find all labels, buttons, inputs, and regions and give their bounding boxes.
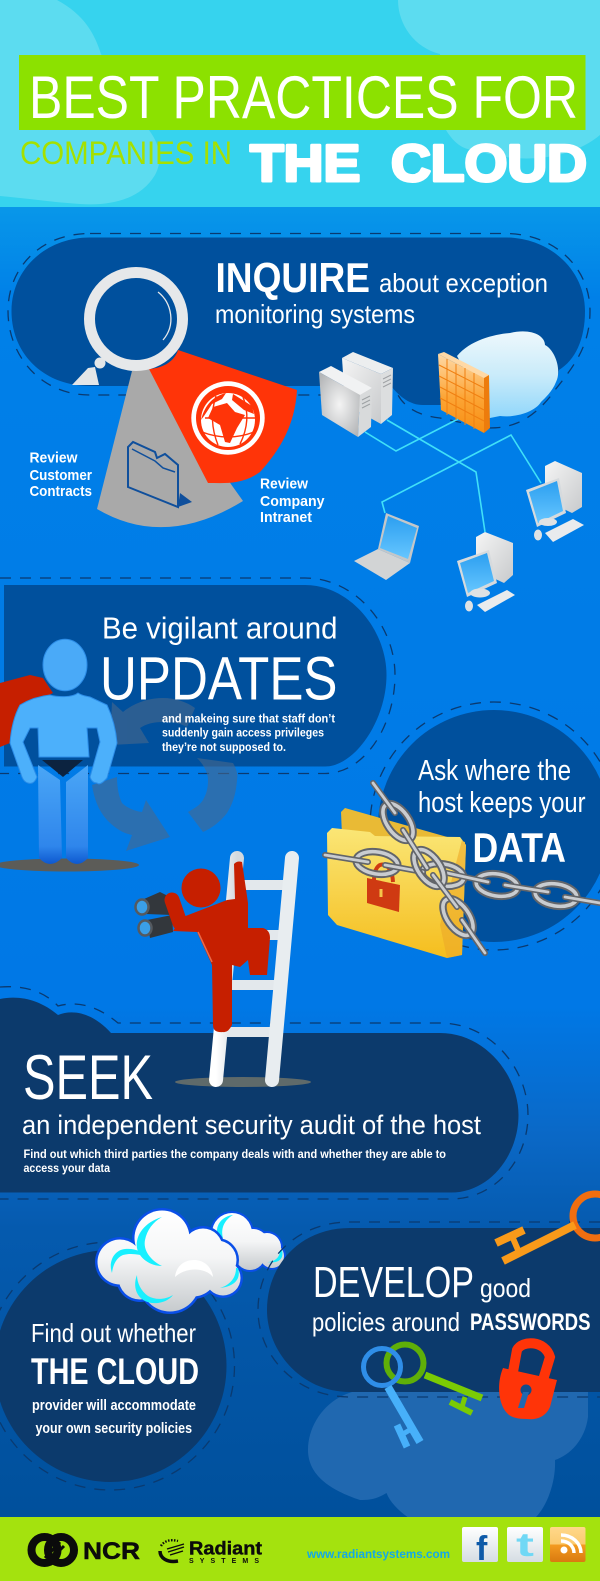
panel shape bbox=[12, 238, 585, 405]
icon: red padlock large bbox=[499, 1343, 557, 1419]
panel: updates bbox=[0, 578, 395, 872]
label: review company intranet: Intranet bbox=[260, 509, 312, 526]
cloud shape: lower right bbox=[308, 1392, 588, 1517]
panel: seek bbox=[0, 987, 528, 1199]
text: updates detail: they’re not supposed to. bbox=[162, 742, 286, 754]
heading: be vigilant around: Be vigilant around bbox=[102, 610, 338, 646]
panel shape bbox=[378, 710, 600, 942]
header background bbox=[0, 0, 600, 207]
panel: footer bbox=[0, 1517, 600, 1581]
panel: header bbox=[0, 0, 600, 207]
icon: big white cloud bbox=[95, 1208, 243, 1314]
icon: circular arrows bbox=[92, 698, 237, 851]
icon: desktop right bbox=[526, 461, 584, 542]
panel shape bbox=[4, 585, 386, 766]
icon: facebook: f bbox=[476, 1530, 488, 1568]
logo: NCR bbox=[32, 1537, 140, 1565]
heading: data: DATA bbox=[472, 824, 566, 871]
logo: NCR: NCR bbox=[83, 1538, 140, 1565]
text: security policies: provider will accommodate bbox=[32, 1397, 196, 1414]
text: website: www.radiantsystems.com bbox=[306, 1547, 450, 1561]
logo: Radiant Systems: SYSTEMS bbox=[189, 1558, 259, 1565]
text: seek detail: Find out which third parties the company deals with and whether they are able to bbox=[24, 1147, 446, 1161]
heading: seek: SEEK bbox=[23, 1043, 153, 1113]
label: review customer contracts: Review bbox=[30, 450, 78, 466]
text: seek detail: access your data bbox=[24, 1161, 110, 1175]
ladder bbox=[216, 858, 292, 1080]
panel: data bbox=[325, 702, 600, 958]
icon: twitter: t bbox=[516, 1526, 534, 1563]
text: security policies: your own security policies bbox=[36, 1420, 192, 1437]
label: review customer contracts bbox=[30, 450, 92, 500]
wedge: company intranet bbox=[149, 350, 297, 483]
dashed outline bbox=[8, 234, 590, 428]
icon: firewall bbox=[438, 352, 490, 433]
cloud shape: header right bbox=[398, 0, 600, 158]
logo: Radiant Systems bbox=[160, 1538, 262, 1565]
heading: inquire: INQUIRE bbox=[216, 254, 370, 301]
text: good: good bbox=[480, 1273, 531, 1303]
label: review customer contracts: Customer bbox=[30, 467, 92, 484]
icon: orange key bbox=[496, 1194, 600, 1261]
text: updates detail bbox=[162, 714, 335, 754]
illustration: hero bbox=[0, 639, 139, 872]
icon: servers bbox=[319, 352, 393, 437]
label: review company intranet: Company bbox=[260, 493, 325, 510]
icon: blue key bbox=[364, 1348, 420, 1447]
panel shape bbox=[267, 1228, 600, 1392]
text: seek detail bbox=[24, 1147, 446, 1175]
label: review customer contracts: Contracts bbox=[30, 483, 92, 500]
icon: magnifier bbox=[72, 272, 182, 385]
panel: the cloud bbox=[0, 1208, 286, 1490]
text: ask where the host keeps your: Ask where the bbox=[418, 755, 571, 787]
icon: small white cloud bbox=[210, 1211, 286, 1272]
cloud shape: header left bbox=[0, 0, 160, 204]
dashed outline bbox=[0, 578, 395, 774]
icon: twitter bbox=[507, 1526, 543, 1563]
network lines bbox=[365, 419, 541, 532]
icon: facebook bbox=[462, 1527, 498, 1568]
text: find out whether: Find out whether bbox=[31, 1318, 196, 1348]
subtitle: COMPANIES IN bbox=[20, 135, 232, 171]
ladder shadow bbox=[175, 1077, 311, 1087]
dashed outline bbox=[0, 987, 528, 1199]
heading: the cloud: THE CLOUD bbox=[31, 1351, 199, 1392]
footer background bbox=[0, 1517, 600, 1581]
text: security policies bbox=[32, 1397, 196, 1437]
label: review company intranet: Review bbox=[260, 476, 308, 492]
icon: laptop bbox=[354, 513, 419, 580]
icon: folder bbox=[128, 442, 192, 507]
text: monitoring systems: monitoring systems bbox=[215, 299, 415, 329]
title: the cloud: THE CLOUD bbox=[250, 135, 587, 193]
icon: desktop bottom bbox=[457, 532, 515, 612]
icon: cloud in network bbox=[457, 331, 558, 420]
heading: updates: UPDATES bbox=[100, 644, 338, 712]
logo: Radiant Systems: Radiant bbox=[189, 1538, 262, 1558]
icon: red padlock bbox=[367, 864, 400, 912]
icon: binoculars bbox=[136, 892, 173, 938]
illustration: ladder and climber bbox=[136, 858, 311, 1087]
text: updates detail: suddenly gain access privileges bbox=[162, 728, 324, 740]
panel: inquire bbox=[8, 234, 590, 527]
text: independent audit: an independent security audit of the host bbox=[22, 1110, 481, 1140]
dashed outline bbox=[370, 702, 600, 950]
icon: rss bbox=[550, 1527, 586, 1562]
panel shape bbox=[0, 1250, 226, 1482]
icon: yellow folder bbox=[327, 808, 466, 958]
icon: globe bbox=[191, 381, 265, 455]
illustration: red climber bbox=[172, 862, 270, 1032]
icon: chains bbox=[325, 783, 600, 953]
wedge: customer contracts bbox=[97, 369, 243, 527]
panel: develop bbox=[258, 1194, 600, 1447]
icon: green key bbox=[386, 1344, 482, 1413]
title bar bbox=[19, 55, 586, 130]
dashed outline bbox=[258, 1222, 600, 1397]
text: ask where the host keeps your bbox=[418, 755, 586, 819]
heading: develop: DEVELOP bbox=[313, 1258, 474, 1307]
panel shape bbox=[0, 998, 518, 1192]
dashed outline bbox=[0, 1242, 234, 1490]
label: review company intranet bbox=[260, 476, 325, 526]
text: policies around: policies around bbox=[312, 1307, 460, 1337]
text: about exception: about exception bbox=[379, 268, 548, 298]
network diagram bbox=[319, 331, 584, 612]
text: updates detail: and makeing sure that staff don’t bbox=[162, 714, 335, 726]
